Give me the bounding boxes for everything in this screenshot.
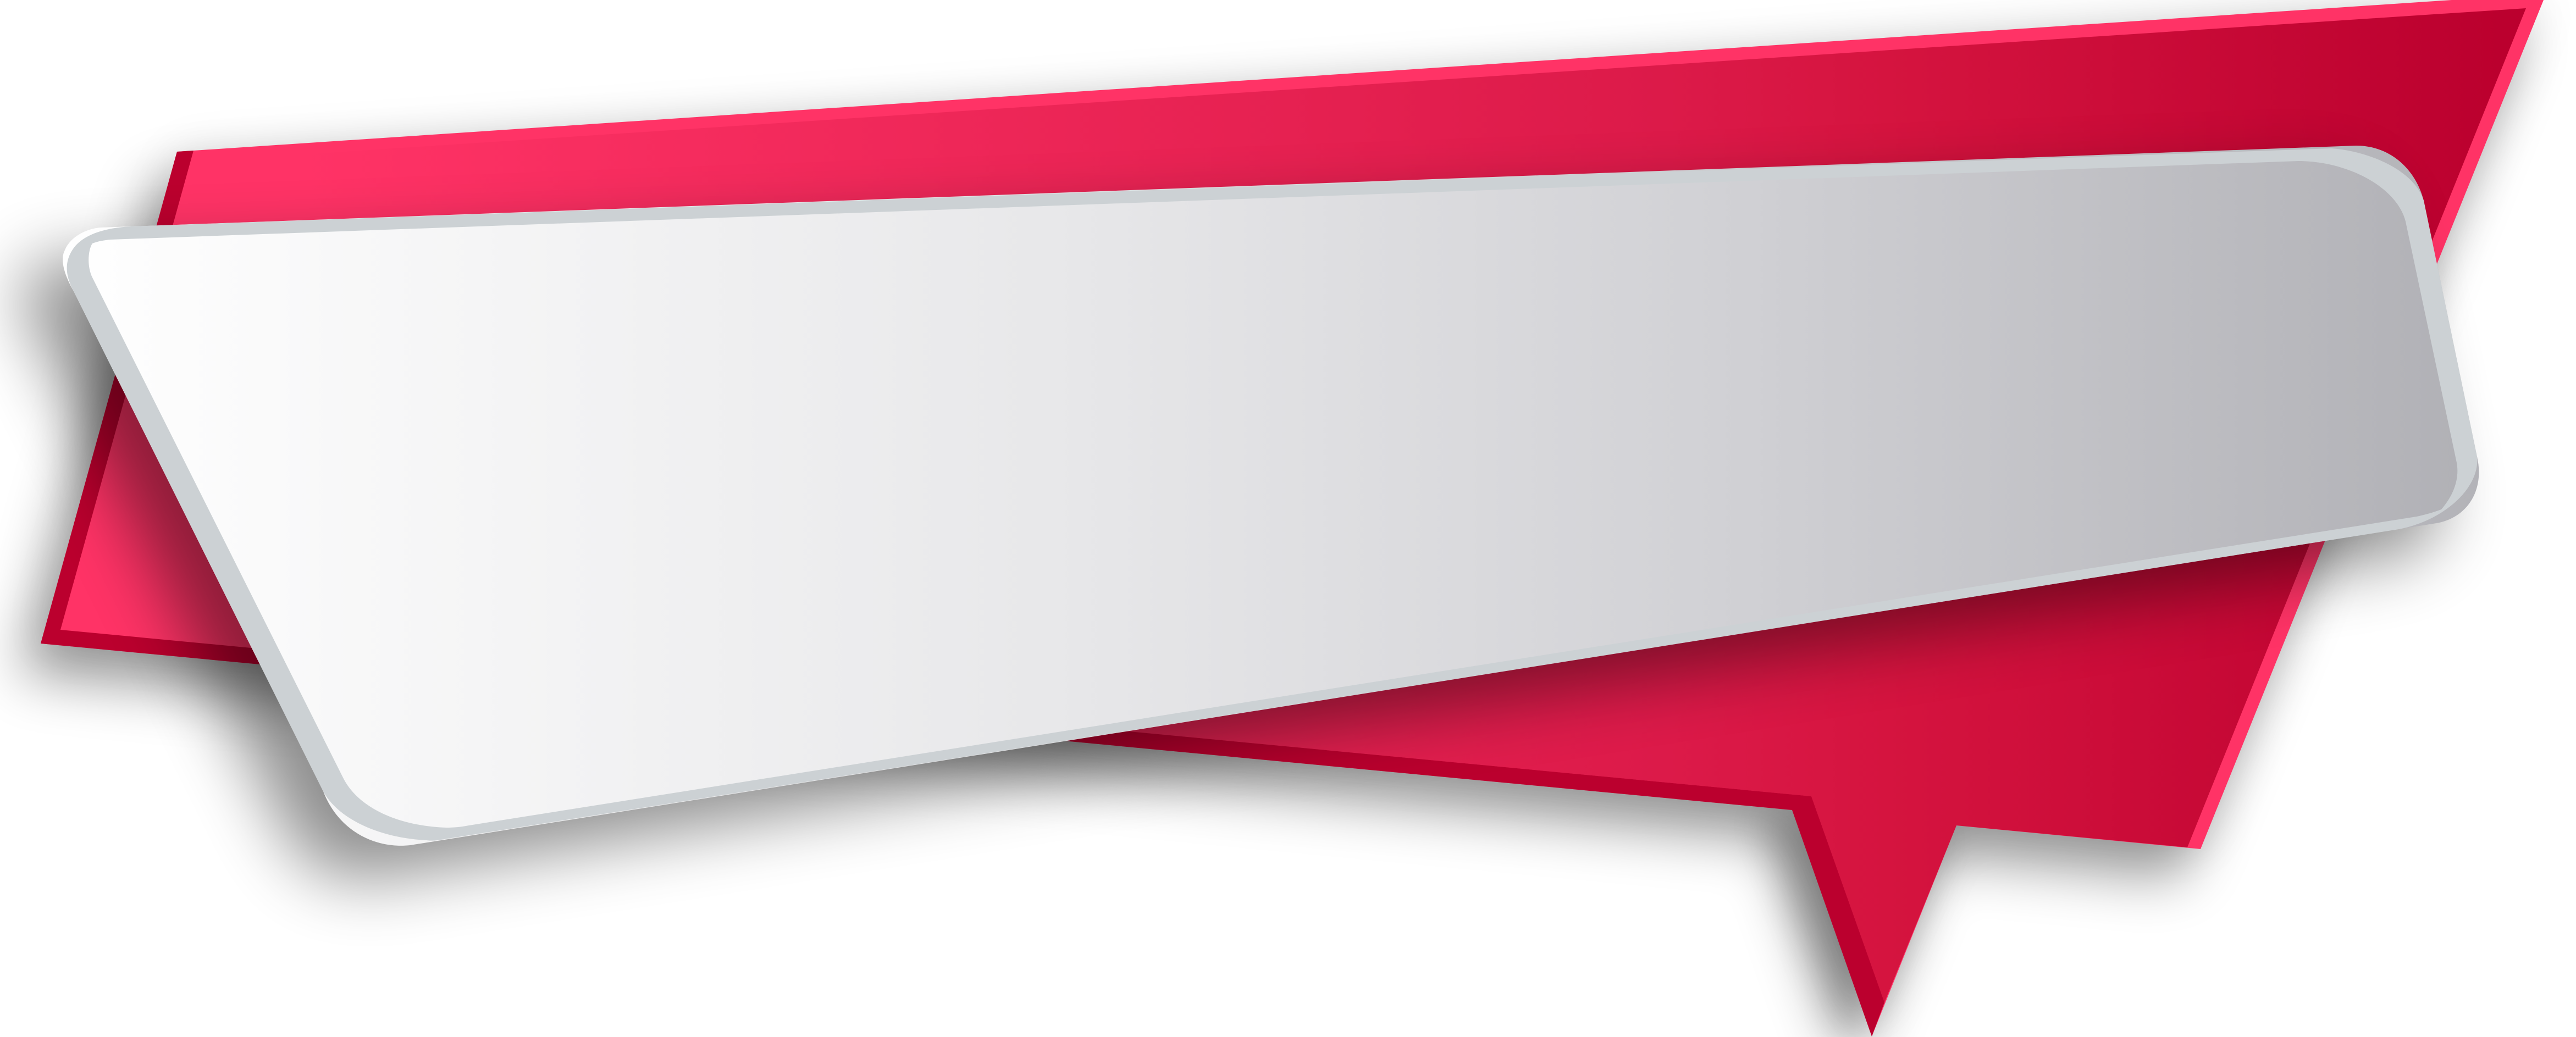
panel gradient face	[89, 161, 2457, 828]
panel grey border	[67, 148, 2477, 841]
shadow: white panel	[21, 179, 2439, 879]
panel base layer	[63, 146, 2479, 846]
panel: blank grey-white label	[63, 146, 2479, 846]
crimson fold on left and bottom edge	[41, 151, 1884, 1036]
